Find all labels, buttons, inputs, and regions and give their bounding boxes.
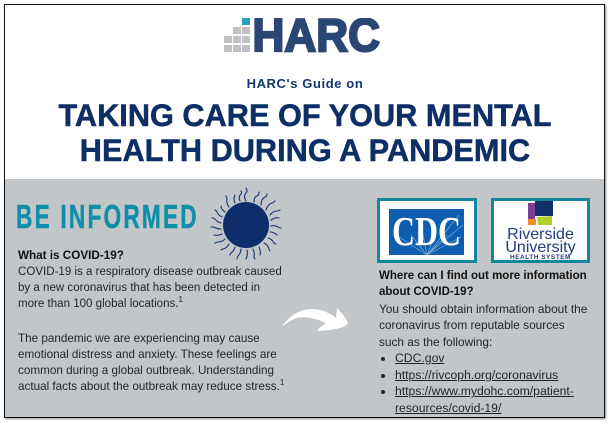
- panel: gray information section: [5, 179, 605, 418]
- text block: what is COVID-19: What is COVID-19?: [18, 249, 124, 262]
- text block: what is COVID-19: The pandemic we are experiencing may cause: [18, 332, 260, 344]
- resource links: resources/covid-19/: [395, 401, 501, 415]
- heading: be informed: BE INFORMED: [16, 198, 199, 235]
- panel: white header: [5, 5, 605, 179]
- text block: what is COVID-19: more than 100 global locations.1: [18, 295, 183, 310]
- icon: virus core: [223, 202, 269, 248]
- resource links: [381, 351, 574, 415]
- text block: what is COVID-19: common during a global outbreak. Understanding: [18, 364, 274, 376]
- logo wordmark: Riverside: [507, 226, 574, 243]
- text block: where can I find out more: You should obtain information about the: [379, 302, 587, 316]
- title: HEALTH DURING A PANDEMIC: [80, 132, 530, 168]
- title: TAKING CARE OF YOUR MENTAL: [58, 97, 552, 133]
- text block: where can I find out more: coronavirus from reputable sources: [379, 318, 565, 332]
- resource links: https://rivcoph.org/coronavirus: [395, 368, 558, 382]
- logo tagline: HEALTH SYSTEM: [510, 254, 571, 261]
- arrow: [282, 308, 348, 331]
- resource links: CDC.gov: [395, 351, 444, 365]
- text block: what is COVID-19: emotional distress and anxiety. These feelings are: [18, 348, 277, 360]
- text block: what is COVID-19: COVID-19 is a respiratory disease outbreak caused: [18, 266, 282, 278]
- resource links: https://www.mydohc.com/patient-: [395, 384, 574, 398]
- logo: CDC: [377, 198, 477, 263]
- text block: what is COVID-19: [18, 249, 284, 392]
- text block: what is COVID-19: by a new coronavirus that has been detected in: [18, 282, 260, 294]
- logo wordmark: [505, 226, 576, 256]
- text block: where can I find out more: about COVID-19?: [379, 286, 474, 298]
- icon: coronavirus: [210, 187, 282, 260]
- text block: what is COVID-19: actual facts about the outbreak may reduce stress.1: [18, 378, 284, 392]
- subtitle: HARC's Guide on: [247, 76, 363, 91]
- logo wordmark: University: [505, 239, 576, 256]
- title: [58, 97, 552, 168]
- text block: where can I find out more: such as the following:: [379, 335, 492, 349]
- text block: where can I find out more: Where can I find out more information: [379, 270, 587, 282]
- text block: where can I find out more: [379, 270, 587, 415]
- logo: Riverside University Health System: [491, 198, 590, 263]
